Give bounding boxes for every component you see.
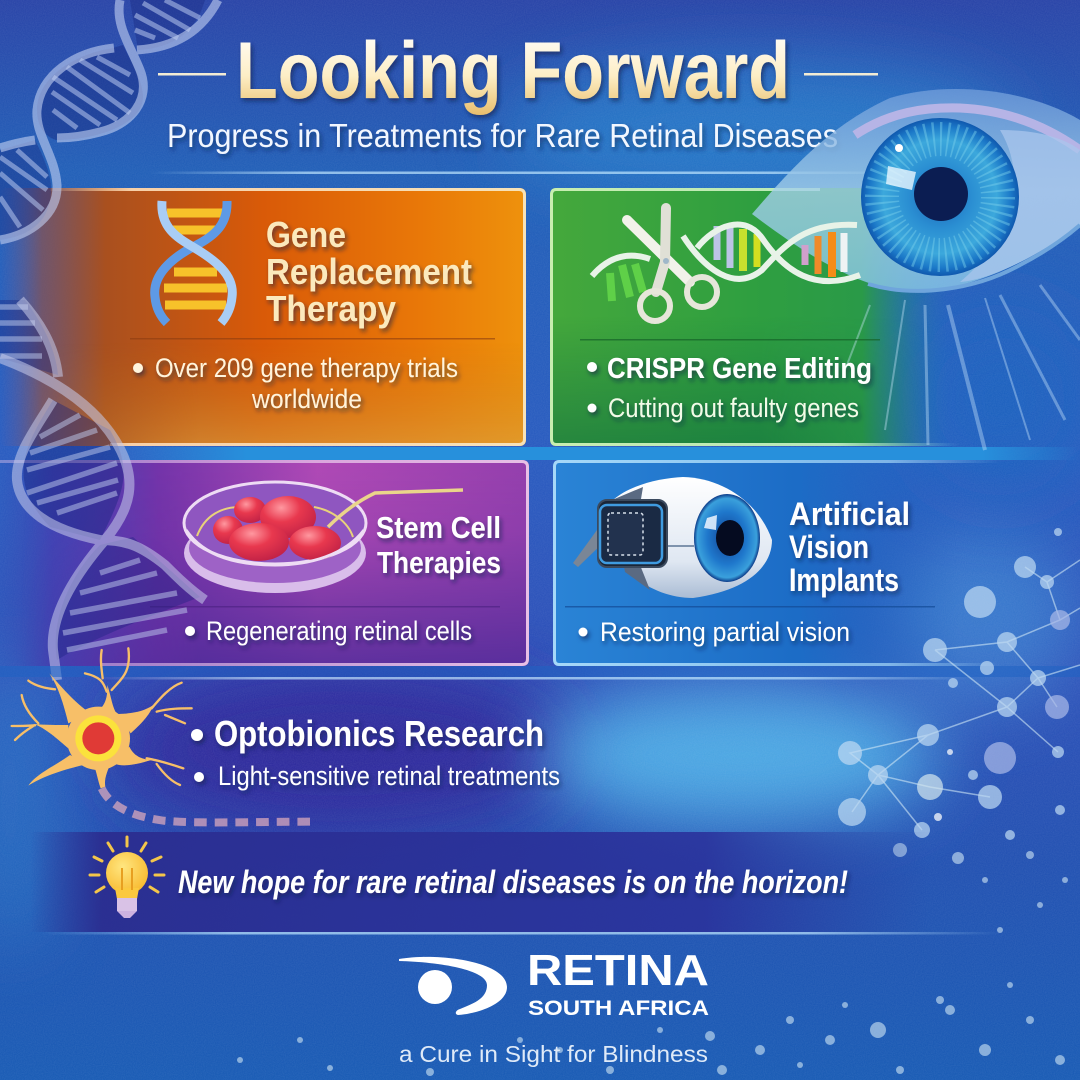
eye rays — [845, 285, 1080, 450]
bullet text: Cutting out faulty genes — [608, 393, 859, 423]
particle network — [237, 528, 1080, 1076]
heading: Implants — [789, 562, 899, 598]
heading: Gene — [266, 214, 346, 255]
icon: large eye — [752, 89, 1080, 291]
bullet text: Regenerating retinal cells — [206, 616, 472, 646]
panel: gene replacement therapy — [0, 188, 526, 446]
dna helix mid left — [0, 300, 205, 680]
dna helix top left — [0, 0, 218, 240]
banner: new hope — [30, 832, 930, 932]
logo: retina south africa — [399, 946, 709, 1020]
panel: crispr gene editing — [550, 188, 960, 446]
title: Looking Forward — [236, 26, 790, 116]
subtitle: Progress in Treatments for Rare Retinal Diseases — [167, 117, 838, 154]
heading — [376, 510, 501, 580]
icon: scissors and dna — [592, 208, 860, 321]
logo: retina south africa: SOUTH AFRICA — [528, 997, 709, 1020]
banner: new hope: New hope for rare retinal diseases is on the horizon! — [178, 864, 848, 900]
tagline: a Cure in Sight for Blindness — [399, 1041, 708, 1067]
heading — [789, 496, 910, 598]
bullet text: CRISPR Gene Editing — [607, 353, 872, 385]
heading — [266, 214, 472, 329]
heading: Stem Cell — [376, 510, 501, 545]
icon: neuron — [12, 648, 310, 822]
icon: petri dish — [184, 482, 463, 593]
bullet text: Over 209 gene therapy trials — [155, 353, 458, 383]
bullet text: worldwide — [251, 384, 362, 414]
heading: Therapies — [377, 545, 501, 580]
optobionics text: Optobionics Research — [214, 713, 544, 754]
icon: light bulb — [90, 837, 164, 918]
heading: Vision — [789, 529, 869, 565]
bullet text — [587, 353, 872, 423]
bullet text: Restoring partial vision — [600, 617, 850, 647]
logo: retina south africa: RETINA — [527, 946, 709, 995]
optobionics text: Light-sensitive retinal treatments — [218, 761, 560, 791]
panel: artificial vision implants — [553, 460, 1000, 666]
icon: bionic eye — [573, 477, 772, 598]
icon: gene helix — [155, 201, 232, 323]
crispr contents — [580, 208, 880, 423]
optobionics text — [191, 713, 560, 791]
panel: stem cell therapies — [0, 460, 529, 666]
heading: Artificial — [789, 496, 910, 532]
heading: Therapy — [266, 288, 396, 329]
heading: Replacement — [266, 251, 472, 292]
bullet text — [133, 353, 458, 414]
